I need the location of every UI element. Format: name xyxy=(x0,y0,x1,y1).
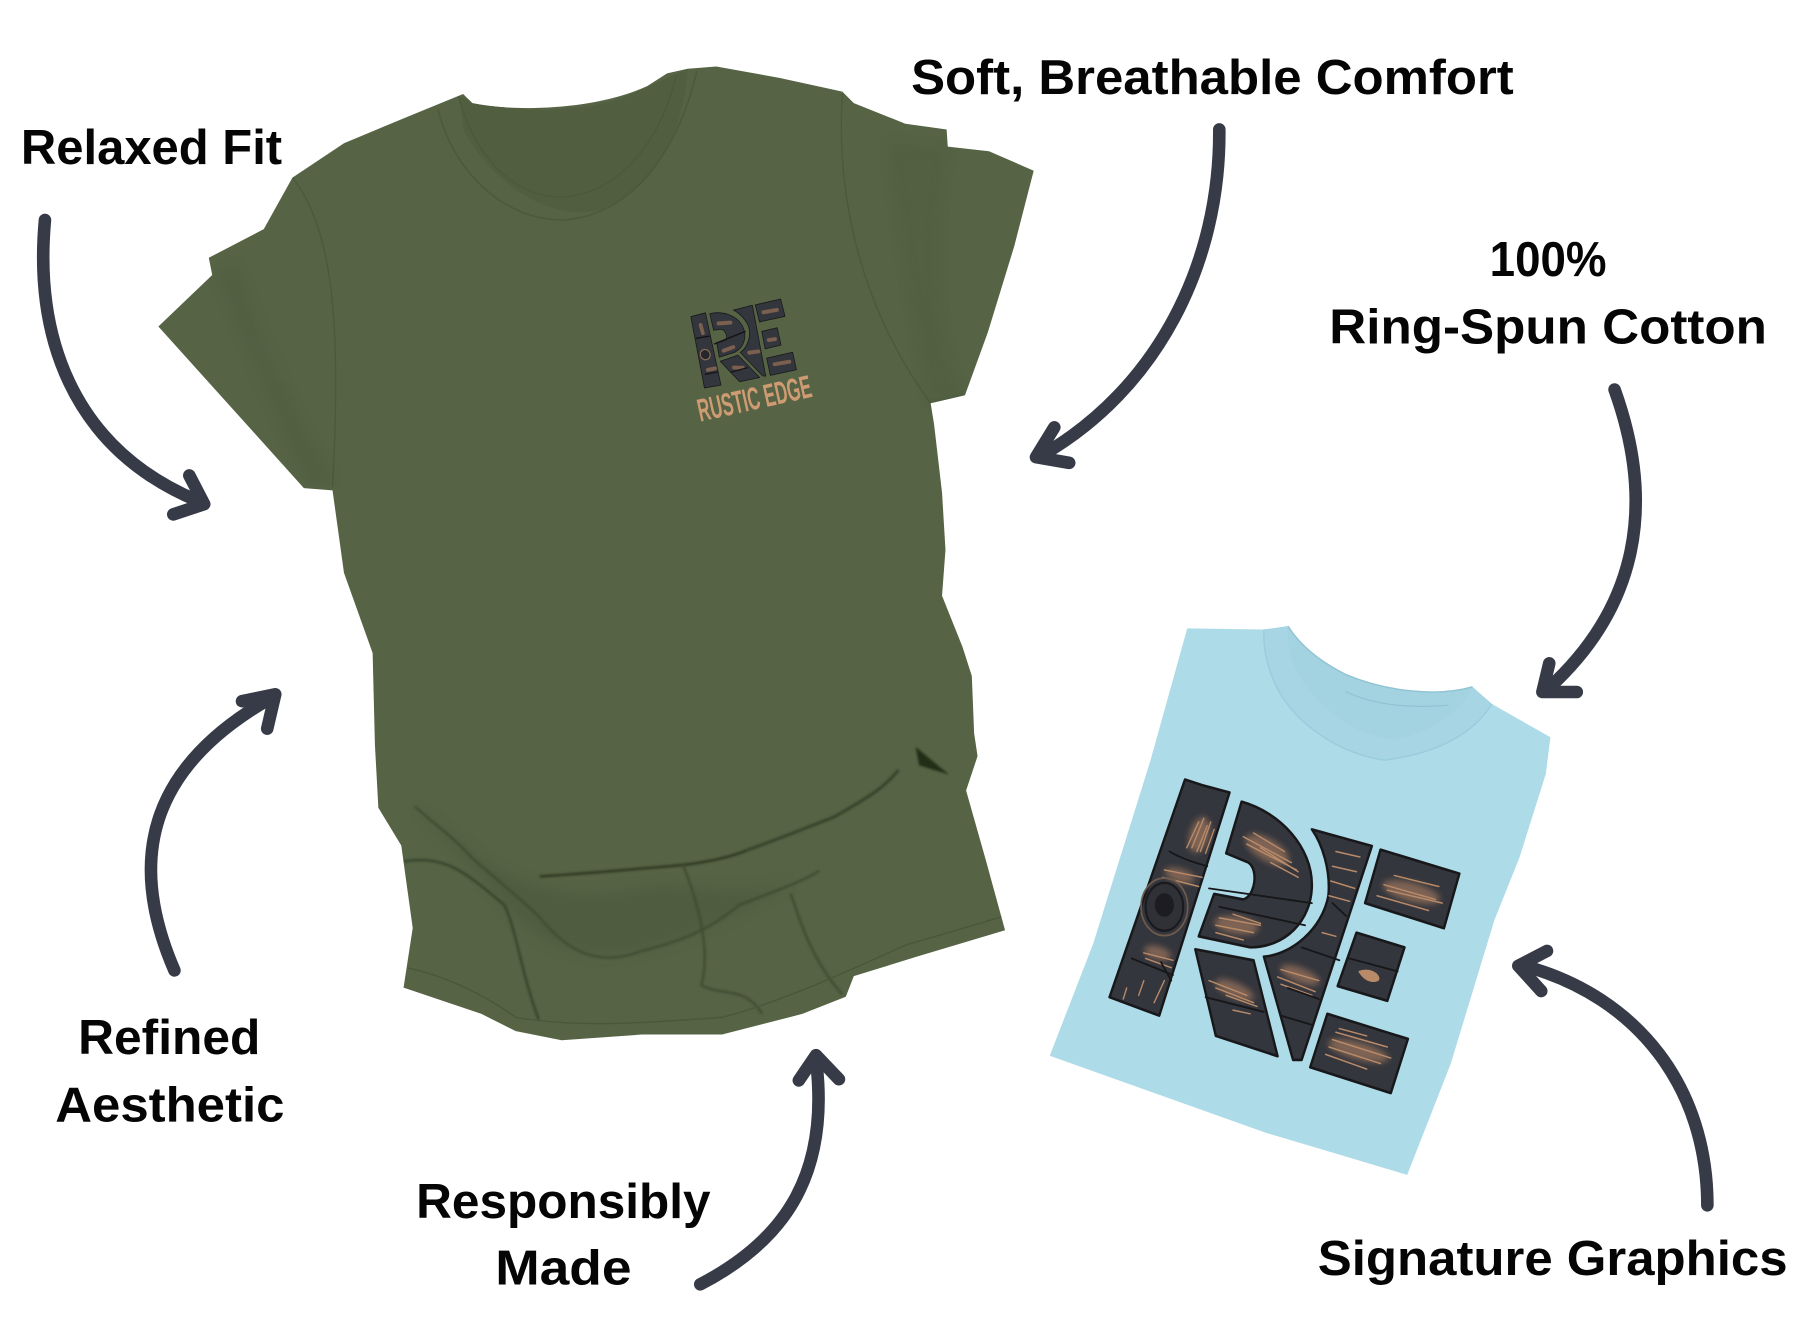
shirt collar band xyxy=(1264,626,1492,760)
label: 100% Ring-Spun Cotton: Ring-Spun Cotton xyxy=(1329,300,1767,355)
chest logo on green shirt xyxy=(670,273,815,414)
wood grain xyxy=(1123,818,1442,1069)
label: Responsibly Made xyxy=(416,1174,711,1295)
large RE wood-plank graphic xyxy=(1110,780,1459,1093)
label: 100% Ring-Spun Cotton: 100% xyxy=(1490,232,1607,287)
arrow: Responsibly Made xyxy=(700,1055,839,1284)
blue shirt body xyxy=(1050,626,1550,1175)
arrow: Soft, Breathable Comfort xyxy=(1036,129,1219,463)
arrow: 100% Ring-Spun Cotton xyxy=(1542,390,1636,692)
label: Soft, Breathable Comfort: Soft, Breathable Comfort xyxy=(911,50,1514,105)
label: Refined Aesthetic: Refined xyxy=(78,1010,260,1065)
green t-shirt xyxy=(158,66,1034,1040)
brand name: RUSTIC EDGE xyxy=(694,368,815,428)
label: Relaxed Fit: Relaxed Fit xyxy=(21,120,282,175)
shirt shading and folds xyxy=(218,69,1003,1024)
arrow: Signature Graphics xyxy=(1518,951,1707,1205)
blue folded t-shirt xyxy=(1050,626,1550,1175)
label: Signature Graphics: Signature Graphics xyxy=(1318,1231,1788,1286)
shirt body xyxy=(158,66,1034,1040)
plank shapes xyxy=(1110,780,1230,1016)
label: Responsibly Made: Made xyxy=(495,1240,632,1295)
arrow: Relaxed Fit xyxy=(43,220,204,514)
label: Responsibly Made: Responsibly xyxy=(416,1174,711,1229)
shirt neck interior xyxy=(1287,626,1472,740)
label: Refined Aesthetic: Aesthetic xyxy=(55,1078,284,1133)
label: 100% Ring-Spun Cotton xyxy=(1329,232,1767,355)
wood knot xyxy=(1141,878,1188,936)
wood colour patches xyxy=(1143,814,1442,1067)
arrow: Refined Aesthetic xyxy=(151,694,275,970)
label: Refined Aesthetic xyxy=(55,1010,284,1133)
